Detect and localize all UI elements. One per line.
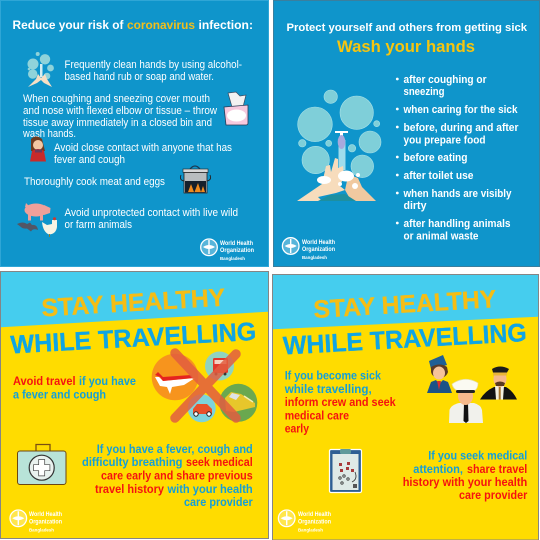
logo: WHO Bangladesh: World Health (298, 511, 331, 518)
text: seek medical care: travel history (95, 483, 165, 496)
list: when to wash hands: or animal waste (404, 230, 478, 242)
icon: bat (17, 222, 38, 232)
text: if you become sick (284, 370, 396, 436)
icon: captain (449, 379, 483, 423)
icon: tissue box (224, 92, 248, 125)
list: when to wash hands: after toilet use (404, 170, 474, 182)
banner: cyan header (273, 275, 538, 329)
list: when to wash hands: you prepare food (404, 134, 486, 146)
text: coughing and sneezing (22, 93, 217, 140)
heading: stay healthy: STAY HEALTHY (313, 285, 497, 324)
heading: while travelling: WHILE TRAVELLING (282, 319, 527, 360)
text: seek medical care: difficulty breathing (82, 456, 182, 469)
text: seek medical care: with your health (167, 483, 253, 496)
list: when to wash hands: before eating (404, 152, 468, 164)
logo: WHO Bangladesh: Bangladesh (29, 528, 54, 533)
logo: WHO Bangladesh: Organization (220, 247, 254, 254)
logo: WHO Bangladesh: Bangladesh (220, 256, 245, 261)
text: seek medical care (82, 443, 253, 509)
list: when to wash hands: before, during and after (404, 122, 519, 134)
logo: WHO Bangladesh: Organization (302, 246, 335, 253)
text: cook meat and eggs: Thoroughly cook meat and eggs (24, 176, 166, 188)
panel: wash your hands (274, 0, 540, 266)
text: animals (64, 207, 238, 231)
text: coughing and sneezing: wash hands. (22, 128, 76, 140)
text: if you become sick: while travelling, (284, 383, 372, 396)
text: coughing and sneezing: and nose with flexed elbow or tissue – throw (23, 105, 217, 117)
text: share travel history: history with your health (403, 476, 527, 489)
text: if you become sick: inform crew and seek (285, 396, 396, 409)
text: seek medical care: seek medical (186, 456, 253, 469)
logo: WHO Bangladesh: World Health (302, 239, 335, 246)
banner: cyan header (1, 272, 268, 327)
panel: avoid travel (0, 272, 268, 538)
logo: WHO Bangladesh: Bangladesh (302, 255, 327, 260)
heading: reduce your risk: coronavirus (127, 18, 195, 32)
logo: WHO Bangladesh: World Health (220, 240, 253, 247)
list: when to wash hands: after handling animals (404, 218, 510, 230)
text: seek medical care: care provider (184, 496, 253, 509)
icon: pig (24, 203, 50, 220)
icon: crossed out transport (152, 352, 257, 422)
text: seek medical care: If you have a fever, cough and (97, 443, 253, 456)
icon: bubbles and washing hands (297, 90, 381, 201)
list: when to wash hands: dirty (404, 200, 426, 212)
logo: WHO Bangladesh (282, 238, 335, 260)
text: share travel history: care provider (459, 489, 528, 502)
text: avoid travel (13, 375, 137, 402)
heading: reduce your risk: Reduce your risk of (12, 18, 124, 32)
text: clean hands: Frequently clean hands by using alcohol- (64, 59, 242, 71)
text: coughing and sneezing: tissue away immediately in a closed bin and (23, 117, 212, 129)
text: clean hands: based hand rub or soap and water. (64, 71, 214, 83)
logo: WHO Bangladesh (278, 510, 331, 533)
logo: WHO Bangladesh (10, 510, 62, 533)
icon: chicken (42, 217, 57, 237)
logo: WHO Bangladesh (201, 239, 254, 261)
heading: while travelling: WHILE TRAVELLING (10, 318, 257, 359)
list: when to wash hands: when caring for the sick (403, 104, 518, 116)
text: animals: Avoid unprotected contact with live wild (64, 207, 238, 219)
list: when to wash hands: sneezing (404, 86, 444, 98)
icon: flight attendant (427, 355, 452, 393)
text: avoid close contact: fever and cough (54, 154, 125, 166)
icon: pilot (480, 366, 517, 400)
text: share travel history: attention, (413, 463, 463, 476)
heading: stay healthy: STAY HEALTHY (41, 284, 226, 322)
panel: sick while travelling (272, 274, 538, 540)
icon: first aid kit (18, 444, 66, 484)
text: avoid travel: Avoid travel (13, 375, 76, 388)
logo: WHO Bangladesh: Organization (29, 518, 62, 525)
text: coughing and sneezing: When coughing and sneezing cover mouth (23, 93, 210, 105)
list: when to wash hands (396, 74, 519, 242)
text: seek medical care: care early and share previous (101, 470, 253, 482)
text: animals: or farm animals (64, 219, 133, 231)
logo: WHO Bangladesh: Organization (298, 518, 331, 525)
text: avoid travel: a fever and cough (13, 388, 106, 402)
heading: reduce your risk (12, 18, 253, 32)
text: clean hands (64, 59, 242, 83)
panel: reduce your risk (0, 0, 268, 266)
heading: wash your hands: Wash your hands (337, 37, 475, 56)
logo: WHO Bangladesh: World Health (29, 511, 62, 518)
list: when to wash hands: when hands are visibly (403, 188, 512, 200)
text: if you become sick: medical care (285, 410, 349, 422)
heading: reduce your risk: infection: (198, 18, 253, 32)
text: avoid close contact: Avoid close contact with anyone that has (54, 142, 233, 154)
text: if you become sick: early (285, 422, 309, 436)
list: when to wash hands: after coughing or (404, 74, 487, 86)
text: avoid close contact (54, 142, 233, 166)
heading: protect yourself: Protect yourself and others from getting sick (286, 22, 528, 34)
icon: woman coughing (30, 136, 46, 162)
icon: cooking pot (180, 166, 211, 193)
text: avoid travel: if you have (79, 375, 137, 388)
icon: clipboard (330, 449, 362, 492)
text: share travel history: If you seek medical (428, 450, 527, 463)
text: share travel history: share travel (467, 463, 527, 476)
text: share travel history (403, 450, 528, 502)
text: if you become sick: If you become sick (285, 370, 382, 382)
logo: WHO Bangladesh: Bangladesh (298, 528, 323, 533)
icon: hand washing small (28, 52, 54, 87)
